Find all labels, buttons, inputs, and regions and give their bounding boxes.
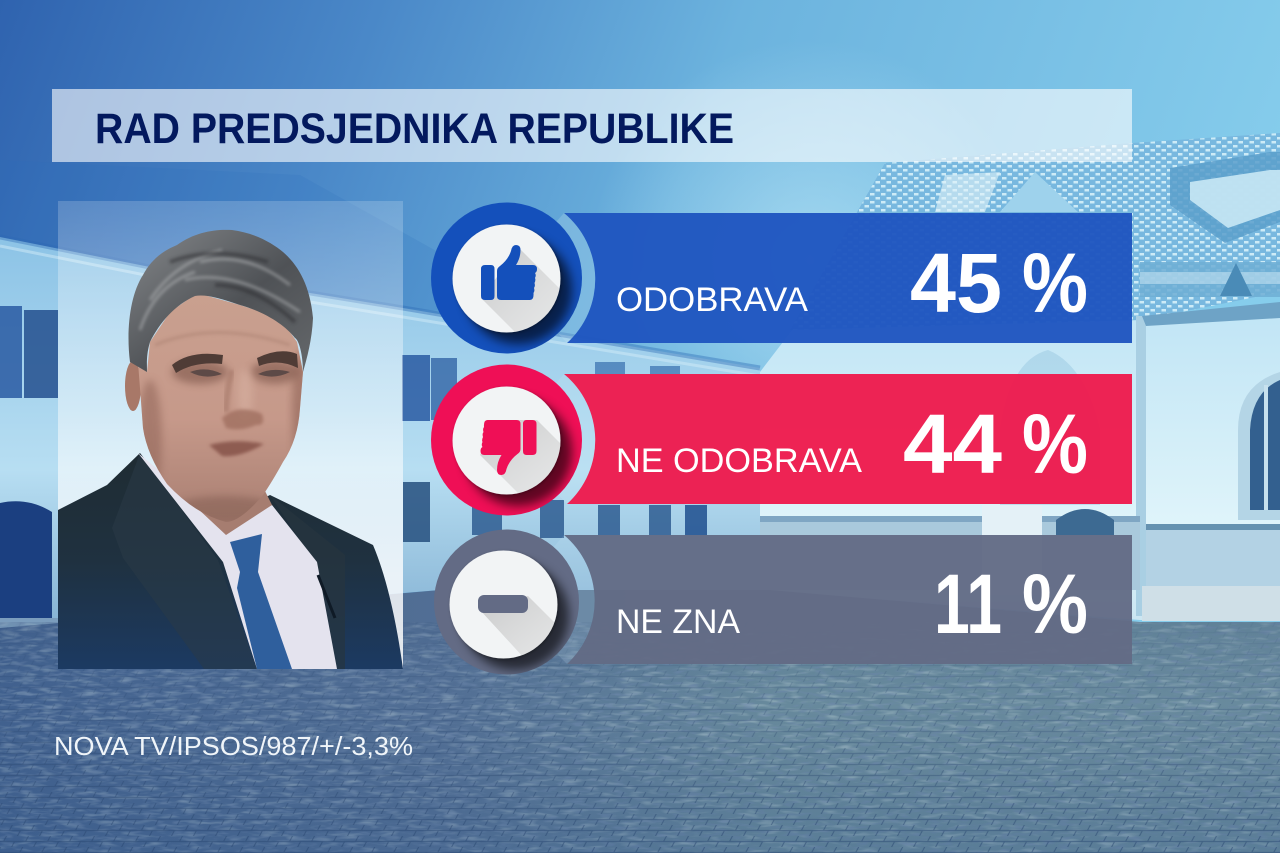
bar: odobrava: [564, 213, 1132, 343]
value: 45 %: 45: [910, 236, 1002, 330]
church: [760, 133, 1280, 621]
cobblestone ground: [0, 590, 1280, 853]
label: ne odobrava: NE ODOBRAVA: [616, 442, 862, 480]
mouth: [209, 441, 264, 456]
left lapel: [129, 453, 257, 669]
portrait panel: [58, 201, 403, 669]
eyes: [190, 369, 222, 377]
icon: thumbs down: [431, 364, 595, 516]
title bar: [52, 89, 1132, 162]
arched gate: [0, 501, 52, 620]
value: 44 %: %: [1022, 397, 1088, 491]
value: 11 %: [934, 557, 1088, 651]
face shading: [138, 332, 308, 524]
value: 44 %: 44: [903, 397, 1002, 491]
bar: ne zna: [564, 535, 1132, 664]
hair: [129, 230, 313, 372]
value: 45 %: [910, 236, 1088, 330]
label: ne zna: NE ZNA: [616, 603, 740, 641]
neck: [201, 492, 272, 535]
nose: [222, 409, 263, 429]
church window: [1238, 372, 1280, 520]
gothic openings: [1000, 350, 1100, 505]
right lapel: [270, 495, 345, 669]
value: 45 %: %: [1022, 236, 1088, 330]
face: [138, 293, 303, 522]
jacket: [58, 453, 403, 669]
eyebrows: [172, 354, 223, 373]
shirt: [138, 453, 337, 669]
icon: thumbs up: [431, 202, 595, 354]
ear: [125, 361, 141, 411]
tie: [230, 534, 292, 669]
title: RAD PREDSJEDNIKA REPUBLIKE: [95, 105, 734, 153]
value: 44 %: [903, 397, 1088, 491]
left building: [0, 160, 770, 630]
value: 11 %: 11: [934, 557, 1002, 651]
icon: minus: [434, 530, 595, 674]
microphone: [318, 575, 335, 618]
value: 11 %: %: [1022, 557, 1088, 651]
label: odobrava: ODOBRAVA: [616, 281, 808, 319]
source note: NOVA TV/IPSOS/987/+/-3,3%: [54, 731, 413, 761]
bar: ne odobrava: [564, 374, 1132, 504]
